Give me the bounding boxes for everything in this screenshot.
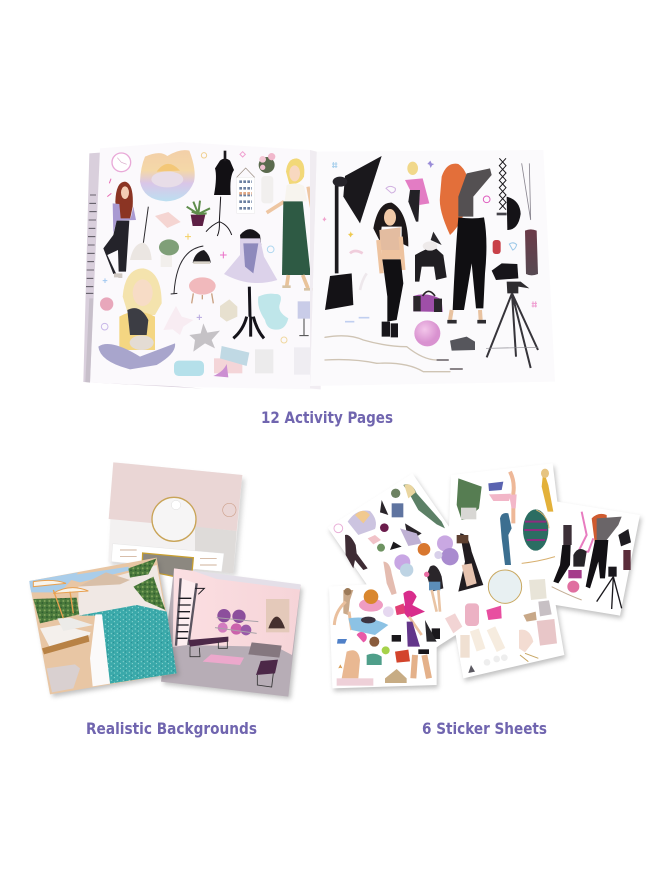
background sheet: bathroom (108, 462, 242, 580)
beanbag sticker (140, 150, 195, 201)
wall bars (176, 578, 204, 646)
boxing glove (493, 240, 501, 254)
background sheet: pool (29, 558, 177, 694)
blue plate (174, 361, 204, 376)
pink ball (100, 297, 113, 311)
studio softbox light (325, 156, 382, 310)
sun loungers (40, 618, 93, 692)
brunette girl (373, 203, 408, 337)
redhead girl (103, 182, 136, 278)
heading: Realistic Backgrounds: Realistic Backgrounds (86, 719, 257, 738)
pink stool (189, 277, 216, 303)
purple exercise balls (215, 609, 258, 635)
panel: realistic backgrounds (29, 462, 303, 699)
book right page (310, 150, 555, 386)
book left page (83, 142, 322, 389)
star stickers (163, 306, 220, 352)
sticker sheet: bedroom decor (445, 570, 557, 673)
heading: 12 Activity Pages: 12 Activity Pages (261, 408, 393, 427)
sticker sheet: egg chair (457, 469, 555, 565)
small camera (450, 337, 475, 351)
small plant (159, 239, 179, 267)
sticker sheet: home interior (334, 484, 445, 570)
tiny stickers (332, 162, 537, 322)
jump ropes (325, 336, 462, 372)
flower vase (259, 153, 275, 203)
gym bag (413, 291, 443, 312)
hat boxes and shoe (213, 346, 249, 377)
dotted card (294, 347, 312, 375)
pink exercise ball (414, 320, 440, 346)
redhead from behind (440, 164, 492, 322)
black mannequin (206, 151, 234, 236)
sitting blonde girl (98, 268, 175, 369)
camera on tripod (486, 263, 538, 368)
sticker sheet: photo studio (552, 512, 631, 609)
curtain (255, 349, 273, 373)
striped ladder decoration (86, 195, 97, 293)
pink sticker box (155, 212, 181, 228)
blue cushion sticker (258, 294, 288, 330)
sticker sheet: balloons (383, 533, 483, 612)
wall poster (266, 599, 289, 632)
white deck strip (90, 614, 110, 686)
sticker sheet: beach (334, 588, 440, 686)
bow poster (237, 168, 255, 213)
swimming pool (79, 605, 177, 684)
round mirror (152, 497, 196, 541)
benches (188, 637, 278, 687)
punching bag (522, 163, 538, 275)
wall lamp (223, 503, 236, 517)
white sticker sheets (328, 463, 640, 688)
panel: open activity book (83, 142, 555, 389)
pavilion roof (78, 572, 130, 587)
tropical plants (33, 577, 165, 623)
parasols (33, 580, 88, 618)
tiny stickers (101, 152, 287, 343)
stepper block (248, 642, 282, 658)
boston terrier (415, 232, 447, 282)
zigzag stand (497, 158, 507, 214)
arc lamp (171, 246, 211, 294)
floor lamp sticker (130, 207, 152, 260)
potted plant (187, 201, 210, 226)
heading: 6 Sticker Sheets: 6 Sticker Sheets (422, 719, 547, 738)
background sheet: gym (161, 568, 301, 697)
yoga mat (203, 654, 244, 665)
white vanity (111, 544, 224, 580)
table lamp (298, 301, 312, 336)
panel: sticker sheets (328, 463, 642, 691)
small reflector (507, 197, 521, 230)
jewellery box (220, 299, 237, 322)
dress mannequin (224, 229, 277, 338)
mini girl in pink coat (405, 162, 429, 222)
clock sticker (112, 153, 131, 172)
blonde woman (267, 158, 313, 289)
